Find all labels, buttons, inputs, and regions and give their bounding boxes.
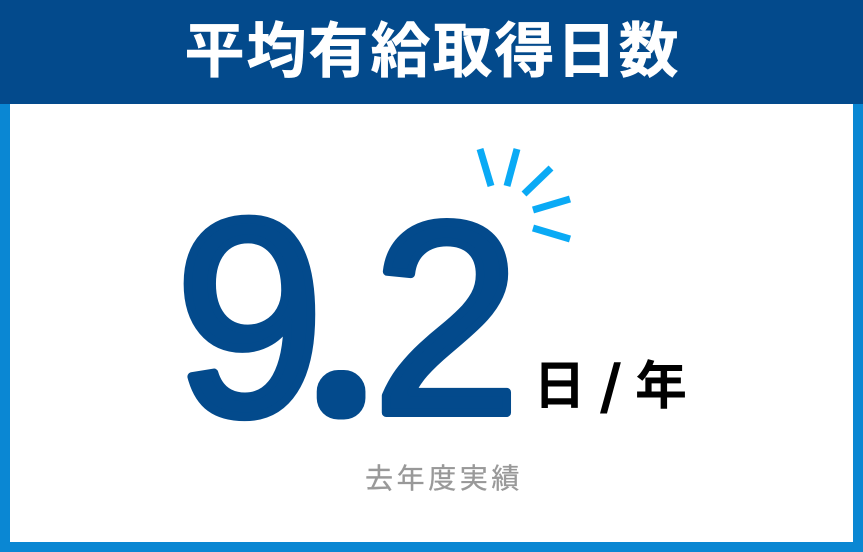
caption: 去年度実績 — [365, 463, 523, 494]
title: 平均有給取得日数 — [184, 18, 680, 85]
header band — [0, 0, 863, 104]
unit label: / — [601, 351, 620, 427]
unit label: 年 — [635, 358, 687, 416]
big number: 9.2: 2 — [373, 166, 520, 470]
big number: 9.2: . — [333, 344, 349, 411]
unit label — [534, 351, 687, 427]
big number: 9.2 — [175, 161, 520, 473]
big number: 9.2: 9 — [175, 161, 324, 473]
icon: emphasis sparkle lines — [480, 149, 570, 239]
unit label: 日 — [534, 358, 586, 416]
